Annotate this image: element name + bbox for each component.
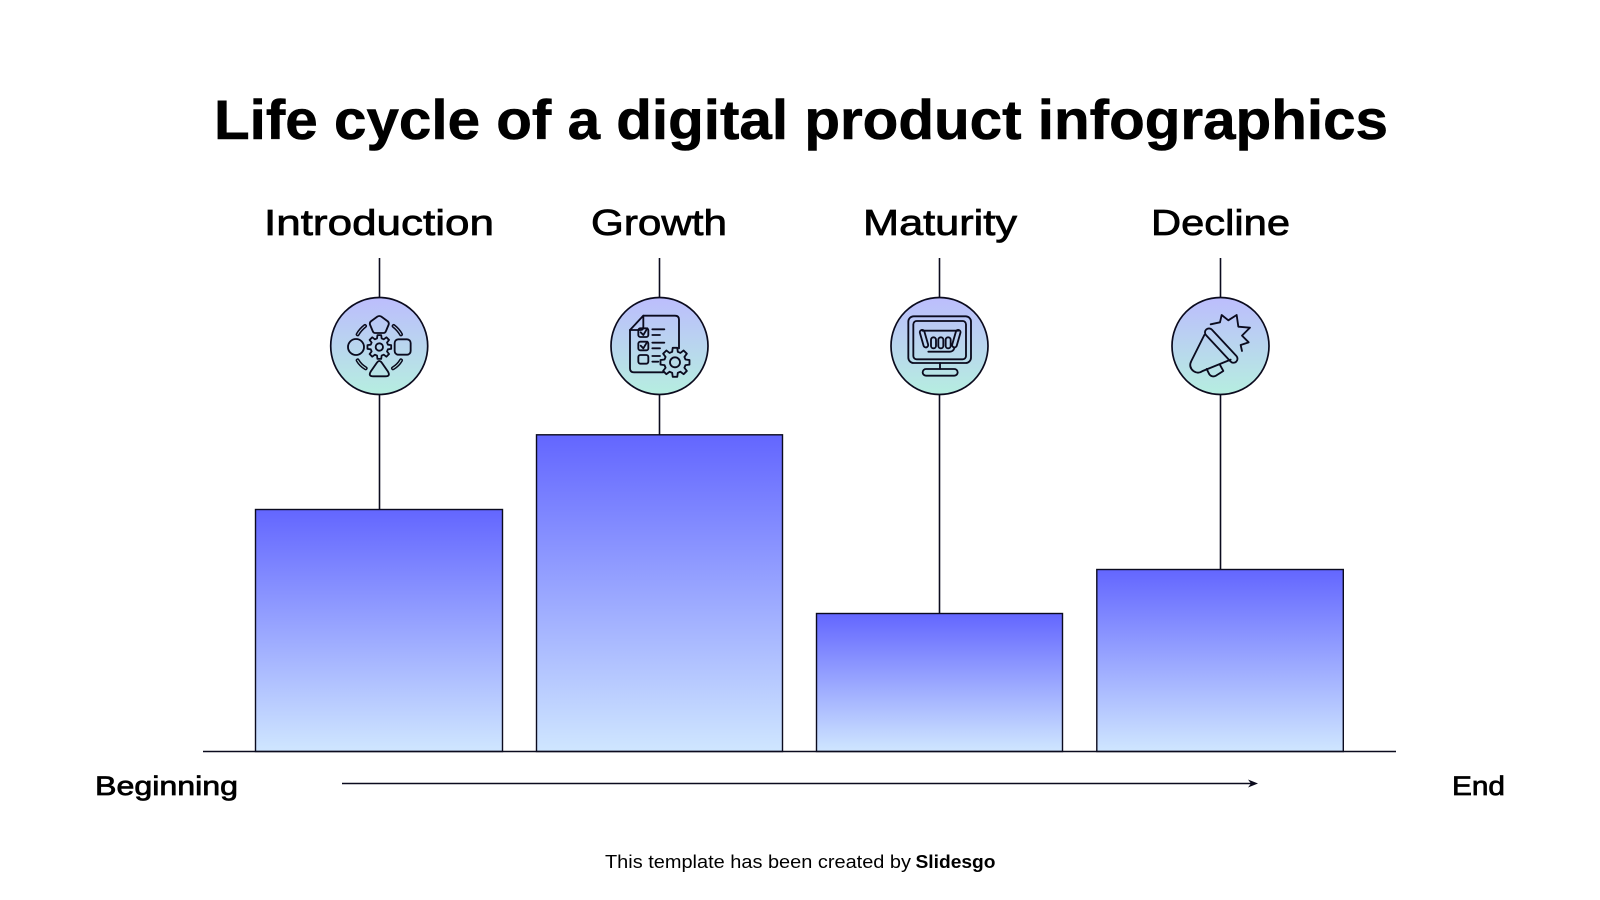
connector: Maturity xyxy=(938,258,940,613)
connector: Decline xyxy=(1220,258,1222,569)
bar: Maturity xyxy=(816,614,1062,752)
axis baseline xyxy=(203,750,1396,752)
beginning label: Beginning xyxy=(95,771,238,801)
title: Life cycle of a digital product infographics xyxy=(214,88,1388,151)
bar: Growth xyxy=(536,435,782,752)
bar: Decline xyxy=(1097,570,1343,752)
connector: Growth xyxy=(658,258,660,435)
timeline arrow xyxy=(342,780,1258,788)
end label: End xyxy=(1452,771,1505,801)
stage label: Growth: Growth xyxy=(591,202,727,243)
icon: shapes and gear xyxy=(331,298,428,394)
icon: checklist document with gear xyxy=(611,298,708,394)
stage label: Decline: Decline xyxy=(1151,202,1290,243)
bar: Introduction xyxy=(256,510,502,752)
icon: shopping basket on monitor xyxy=(891,298,988,394)
footer credit: This template has been created by xyxy=(605,852,911,872)
footer credit: Slidesgo xyxy=(916,852,996,872)
stage label: Maturity: Maturity xyxy=(863,202,1017,243)
connector: Introduction xyxy=(378,258,380,509)
icon: megaphone xyxy=(1172,298,1269,394)
stage label: Introduction: Introduction xyxy=(264,202,494,243)
